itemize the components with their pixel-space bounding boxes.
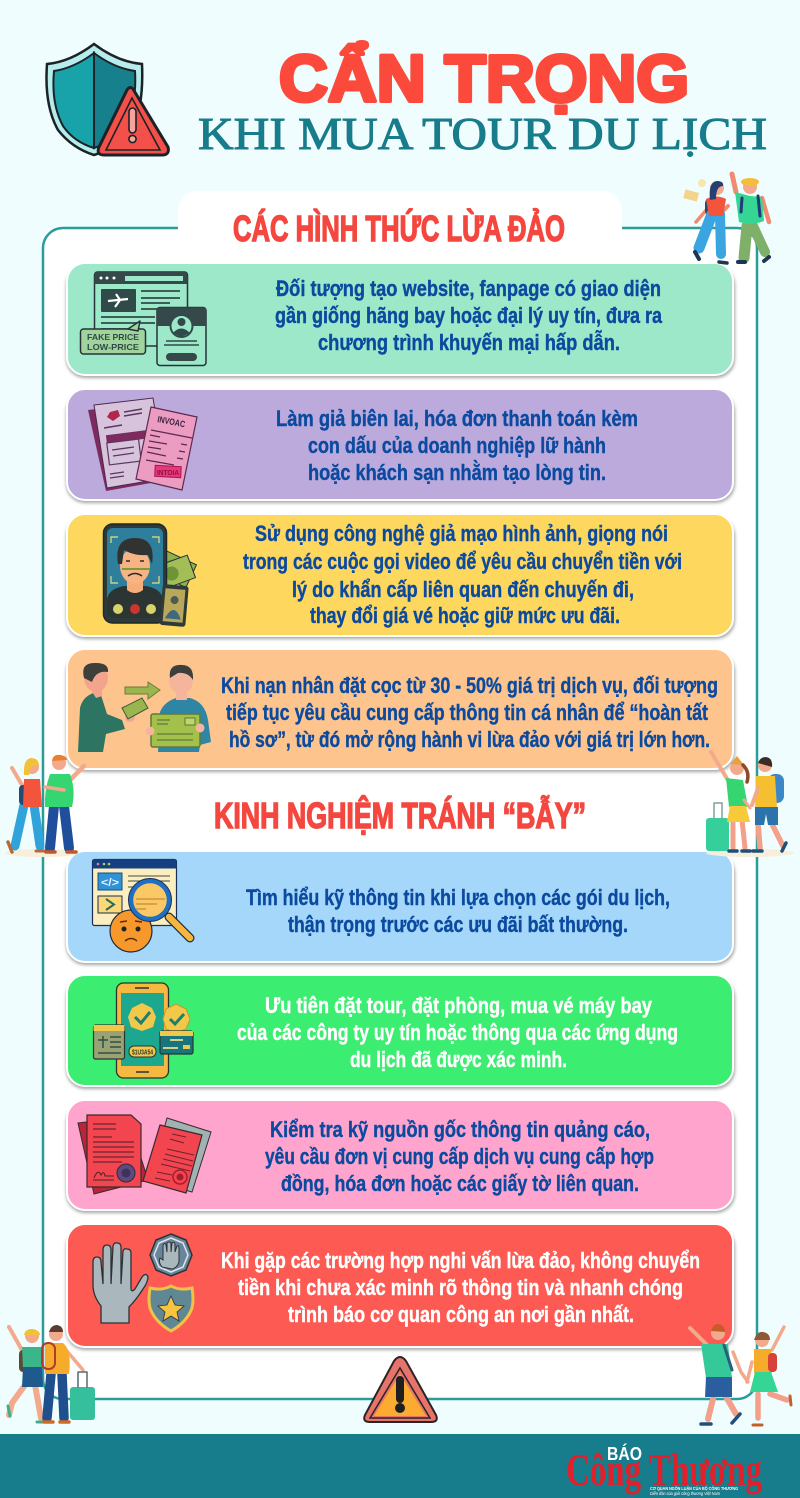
icon: stop hand and police badge <box>93 1234 193 1331</box>
text block: đồng, hóa đơn hoặc các giấy tờ liên quan. <box>281 1171 639 1196</box>
text block: thận trọng trước các ưu đãi bất thường. <box>288 912 628 937</box>
icon: warning triangle <box>364 1357 437 1422</box>
icon: contract documents <box>78 1115 211 1194</box>
text block <box>243 521 682 628</box>
text block <box>265 1117 654 1196</box>
panel: card 2 <box>66 389 735 503</box>
text block: trong các cuộc gọi video để yêu cầu chuyển tiền với <box>243 549 682 574</box>
text block: Khi gặp các trường hợp nghi vấn lừa đảo, không chuyển <box>221 1248 700 1273</box>
text block: Đối tượng tạo website, fanpage có giao diện <box>276 276 661 301</box>
icon: fake website <box>80 272 206 366</box>
title: KHI MUA TOUR DU LỊCH <box>198 108 767 159</box>
text block: thay đổi giá vé hoặc giữ mức ưu đãi. <box>310 603 620 628</box>
text block: Kiểm tra kỹ nguồn gốc thông tin quảng cáo, <box>270 1117 650 1142</box>
text block: yêu cầu đơn vị cung cấp dịch vụ cung cấp hợp <box>265 1144 654 1169</box>
icon: fake website: LOW-PRICE <box>87 342 139 352</box>
text block: gần giống hãng bay hoặc đại lý uy tín, đưa ra <box>275 303 663 328</box>
icon: travellers middle right <box>706 752 794 857</box>
text block <box>221 1248 700 1327</box>
text block: con dấu của doanh nghiệp lữ hành <box>308 433 606 458</box>
footer band <box>0 1434 800 1498</box>
icon: fake invoices <box>88 398 197 491</box>
text block: Làm giả biên lai, hóa đơn thanh toán kèm <box>276 406 638 431</box>
icon: travellers top right <box>683 174 769 263</box>
panel: card 1 <box>66 263 735 378</box>
logo: Báo Công Thương: CƠ QUAN NGÔN LUẬN CỦA BỘ CÔNG THƯƠNG <box>650 1484 738 1491</box>
icon: fake website: FAKE PRICE <box>87 332 139 342</box>
text block: Tìm hiểu kỹ thông tin khi lựa chọn các gói du lịch, <box>246 885 670 910</box>
text block: Sử dụng công nghệ giả mạo hình ảnh, giọng nói <box>255 521 668 546</box>
icon: deepfake video call <box>104 524 196 627</box>
icon: travellers middle left <box>5 755 84 857</box>
panel: main frame <box>43 228 757 1399</box>
title <box>198 41 767 159</box>
icon: shield with warning triangle <box>46 44 168 155</box>
title: CẨN TRỌNG <box>279 41 689 115</box>
text block: tiền khi chưa xác minh rõ thông tin và nhanh chóng <box>238 1275 683 1300</box>
icon: fake invoices: INVOAC <box>157 414 186 429</box>
panel: card 6 <box>66 975 735 1089</box>
panel: card 7 <box>66 1100 735 1213</box>
panel: card 8 <box>66 1224 735 1350</box>
logo: Báo Công Thương: Diễn đàn của giới công thương Việt Nam <box>650 1490 720 1496</box>
panel: card 4 <box>66 649 735 772</box>
icon: website under magnifier with worried face: </> <box>101 877 119 889</box>
heading: avoid the trap: KINH NGHIỆM TRÁNH “BẪY” <box>214 794 586 836</box>
panel: card 5 <box>66 851 735 965</box>
text block: Ưu tiên đặt tour, đặt phòng, mua vé máy bay <box>265 993 653 1018</box>
text block: chương trình khuyến mại hấp dẫn. <box>318 330 620 355</box>
text block: trình báo cơ quan công an nơi gần nhất. <box>288 1302 634 1327</box>
text block <box>221 673 718 752</box>
icon: travellers bottom right <box>690 1324 791 1425</box>
panel: card 3 <box>66 514 735 639</box>
icon: travellers bottom left <box>8 1325 95 1422</box>
icon: website under magnifier with worried face <box>92 860 190 952</box>
text block: của các công ty uy tín hoặc thông qua các ứng dụng <box>237 1020 678 1045</box>
text block: du lịch đã được xác minh. <box>350 1047 567 1072</box>
text block <box>276 406 638 485</box>
text block: lý do khẩn cấp liên quan đến chuyến đi, <box>292 577 634 602</box>
text block <box>275 276 663 355</box>
text block <box>246 885 670 937</box>
text block <box>237 993 678 1072</box>
logo: Báo Công Thương: BÁO <box>607 1443 642 1464</box>
icon: fake invoices: INTOIA <box>157 470 179 477</box>
icon: handing over money and ID card <box>78 663 211 752</box>
icon: verified app on phone <box>94 983 193 1078</box>
text block: hoặc khách sạn nhằm tạo lòng tin. <box>308 460 606 485</box>
panel: heading tab <box>178 191 622 252</box>
heading: scam forms: CÁC HÌNH THỨC LỪA ĐẢO <box>233 207 565 249</box>
icon: verified app on phone: $1U3A54 <box>132 1050 153 1056</box>
